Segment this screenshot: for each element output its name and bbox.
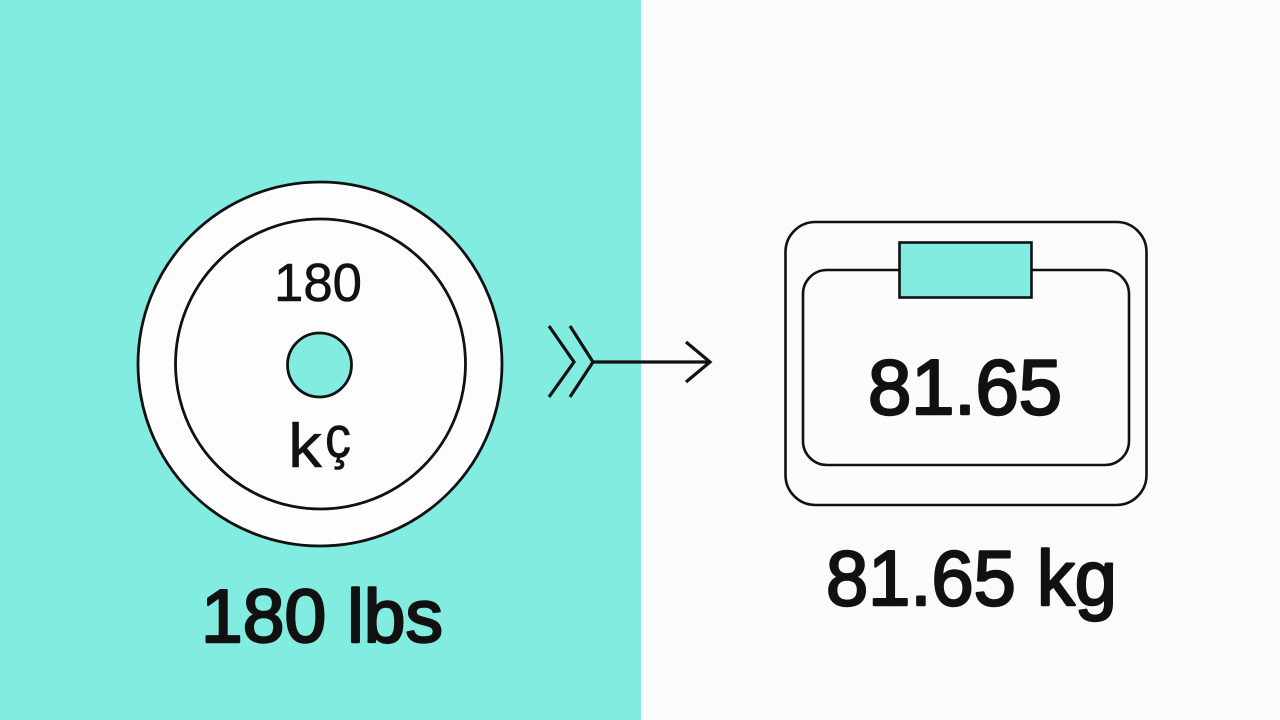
label: kilograms: 81.65 kg: [826, 534, 1117, 622]
scale body: [786, 222, 1146, 505]
plate unit: [288, 405, 351, 481]
icon: bathroom scale: [786, 222, 1146, 505]
arrow outer chevron: [549, 326, 574, 397]
plate centre hole: [288, 333, 352, 397]
icon: weight plate: [138, 182, 502, 546]
plate number: 180: [274, 253, 362, 313]
plate outer rim: [138, 182, 502, 546]
arrow inner chevron: [570, 326, 593, 397]
plate unit letter c with dot: ç: [325, 405, 351, 470]
scale display frame: [803, 270, 1129, 465]
scale reading: 81.65: [868, 343, 1062, 431]
plate inner ring: [176, 219, 466, 509]
label: pounds: 180 lbs: [201, 574, 443, 658]
panel: pounds (teal left side): [0, 0, 641, 720]
arrow: conversion: [549, 326, 710, 397]
scale teal window: [900, 242, 1032, 298]
panel: kilograms (light right side): [641, 0, 1280, 720]
plate unit letter k: k: [288, 412, 323, 481]
arrow shaft and head: [593, 342, 710, 382]
